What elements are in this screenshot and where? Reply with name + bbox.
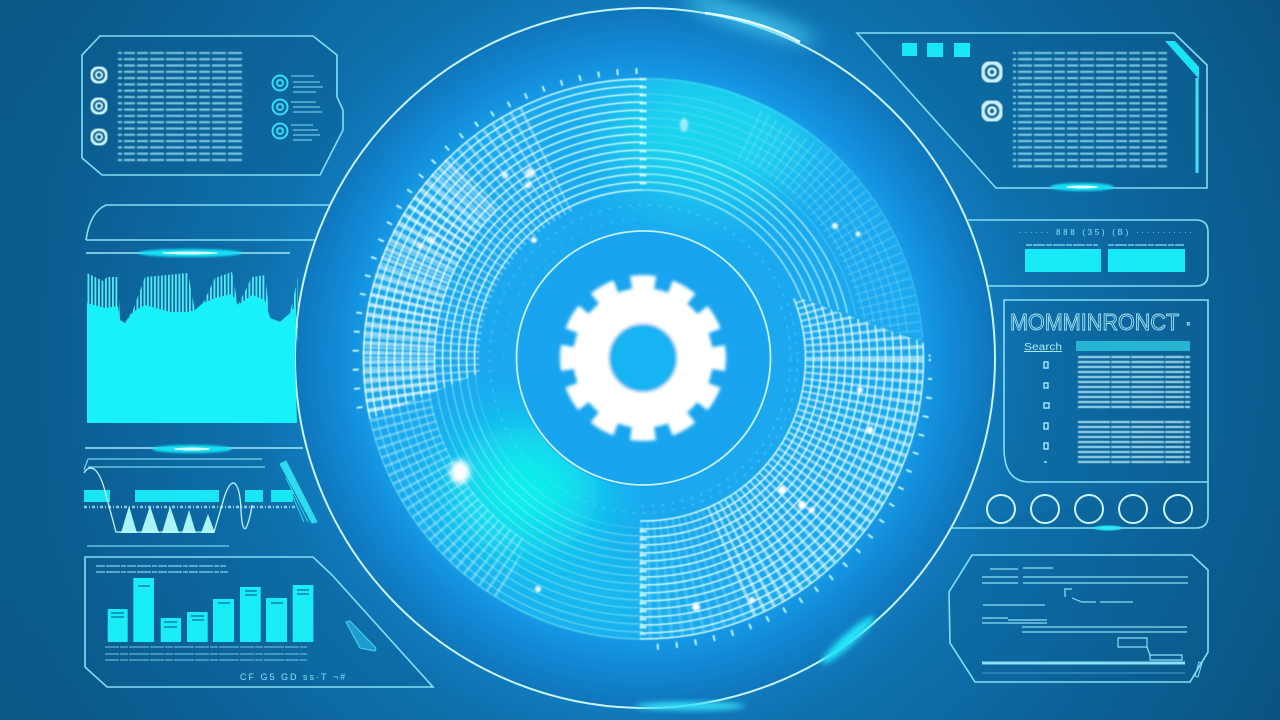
bar labels: [111, 586, 309, 627]
inner ring: [516, 231, 770, 485]
panel: bottom-right schematic: [949, 555, 1208, 682]
header bar: [1076, 341, 1190, 351]
bar captions: [1026, 244, 1184, 246]
panel: radial data disc: [356, 65, 932, 647]
upper-right inner rings: [642, 148, 849, 314]
upper-left bright rings: [362, 78, 644, 420]
glow line bottom: [85, 445, 303, 453]
triangles: [121, 506, 215, 533]
lower-right spokes: [706, 298, 924, 616]
right mini text: [291, 76, 323, 140]
icon: right ring group: [272, 76, 288, 138]
peripheral tick dots: [356, 71, 932, 647]
header text lines: [96, 566, 228, 572]
disc cyan glows: [364, 65, 924, 639]
panel: top-right text: [857, 33, 1207, 191]
text table block 2: [1078, 420, 1190, 466]
panel: bar chart: [85, 557, 433, 687]
lower-right bright rings: [639, 298, 925, 641]
upper-right faint dots: [738, 110, 922, 341]
cyan squares: [902, 43, 970, 57]
area chart: [87, 272, 298, 423]
icon: central gear: [569, 284, 717, 432]
panel: right main: [952, 300, 1208, 530]
text block: [1013, 52, 1167, 169]
inner ghost dots: [490, 205, 798, 513]
footer text lines: [105, 647, 307, 660]
panel: area chart frame: [85, 205, 329, 453]
small legend text: CF G5 GD ss·T ¬#: [240, 672, 347, 682]
upper-left dense patch: [362, 158, 497, 420]
sparkles: [417, 118, 874, 611]
lower-left faint rings: [369, 375, 644, 640]
upper-left spokes: [364, 107, 572, 413]
panel: right-middle values: [968, 220, 1208, 286]
value label: ······ 888 (35) (B) ···········: [1019, 228, 1193, 237]
bars: [108, 578, 313, 642]
thick rule: [982, 662, 1185, 664]
text table block 1: [1078, 356, 1190, 408]
outer circle glows: [635, 0, 878, 710]
indicator circles: [987, 495, 1192, 523]
accent strip: [1165, 41, 1199, 173]
upper-right outer rings: [643, 78, 924, 338]
row marks: [1044, 362, 1049, 462]
icon: ring 1: [982, 62, 1002, 82]
panel: wave chart: [84, 459, 317, 546]
icon: ring 2: [982, 102, 1002, 120]
small mark: [1195, 662, 1202, 677]
sine wave: [84, 468, 252, 532]
cyan bars: [1025, 249, 1185, 272]
bottom faint spokes: [640, 510, 746, 638]
dotted axis: [84, 506, 295, 508]
cyan blocks: [84, 490, 293, 502]
top lines: [84, 459, 265, 470]
panel: top-left text: [82, 36, 343, 175]
left edge shading: [0, 0, 120, 720]
icon: left ring 3: [92, 130, 106, 144]
glow: [1050, 183, 1114, 191]
icon: left ring 1: [92, 68, 106, 82]
text block: [118, 52, 242, 164]
schematic lines: [982, 568, 1188, 660]
slanted strip: [346, 621, 376, 651]
heading: MOMMINRONCT ·: [1010, 309, 1192, 335]
icon: left ring 2: [92, 98, 106, 114]
lower-left dotted spokes: [370, 398, 524, 598]
glow line top: [86, 249, 290, 257]
blurred ring field: [364, 78, 924, 639]
glow: [1094, 526, 1122, 530]
outer circle: [295, 0, 995, 710]
search label: Search: [1024, 342, 1062, 353]
centre column ticks: [640, 78, 646, 635]
diagonal strip: [280, 461, 317, 523]
gear hub: [609, 324, 677, 392]
